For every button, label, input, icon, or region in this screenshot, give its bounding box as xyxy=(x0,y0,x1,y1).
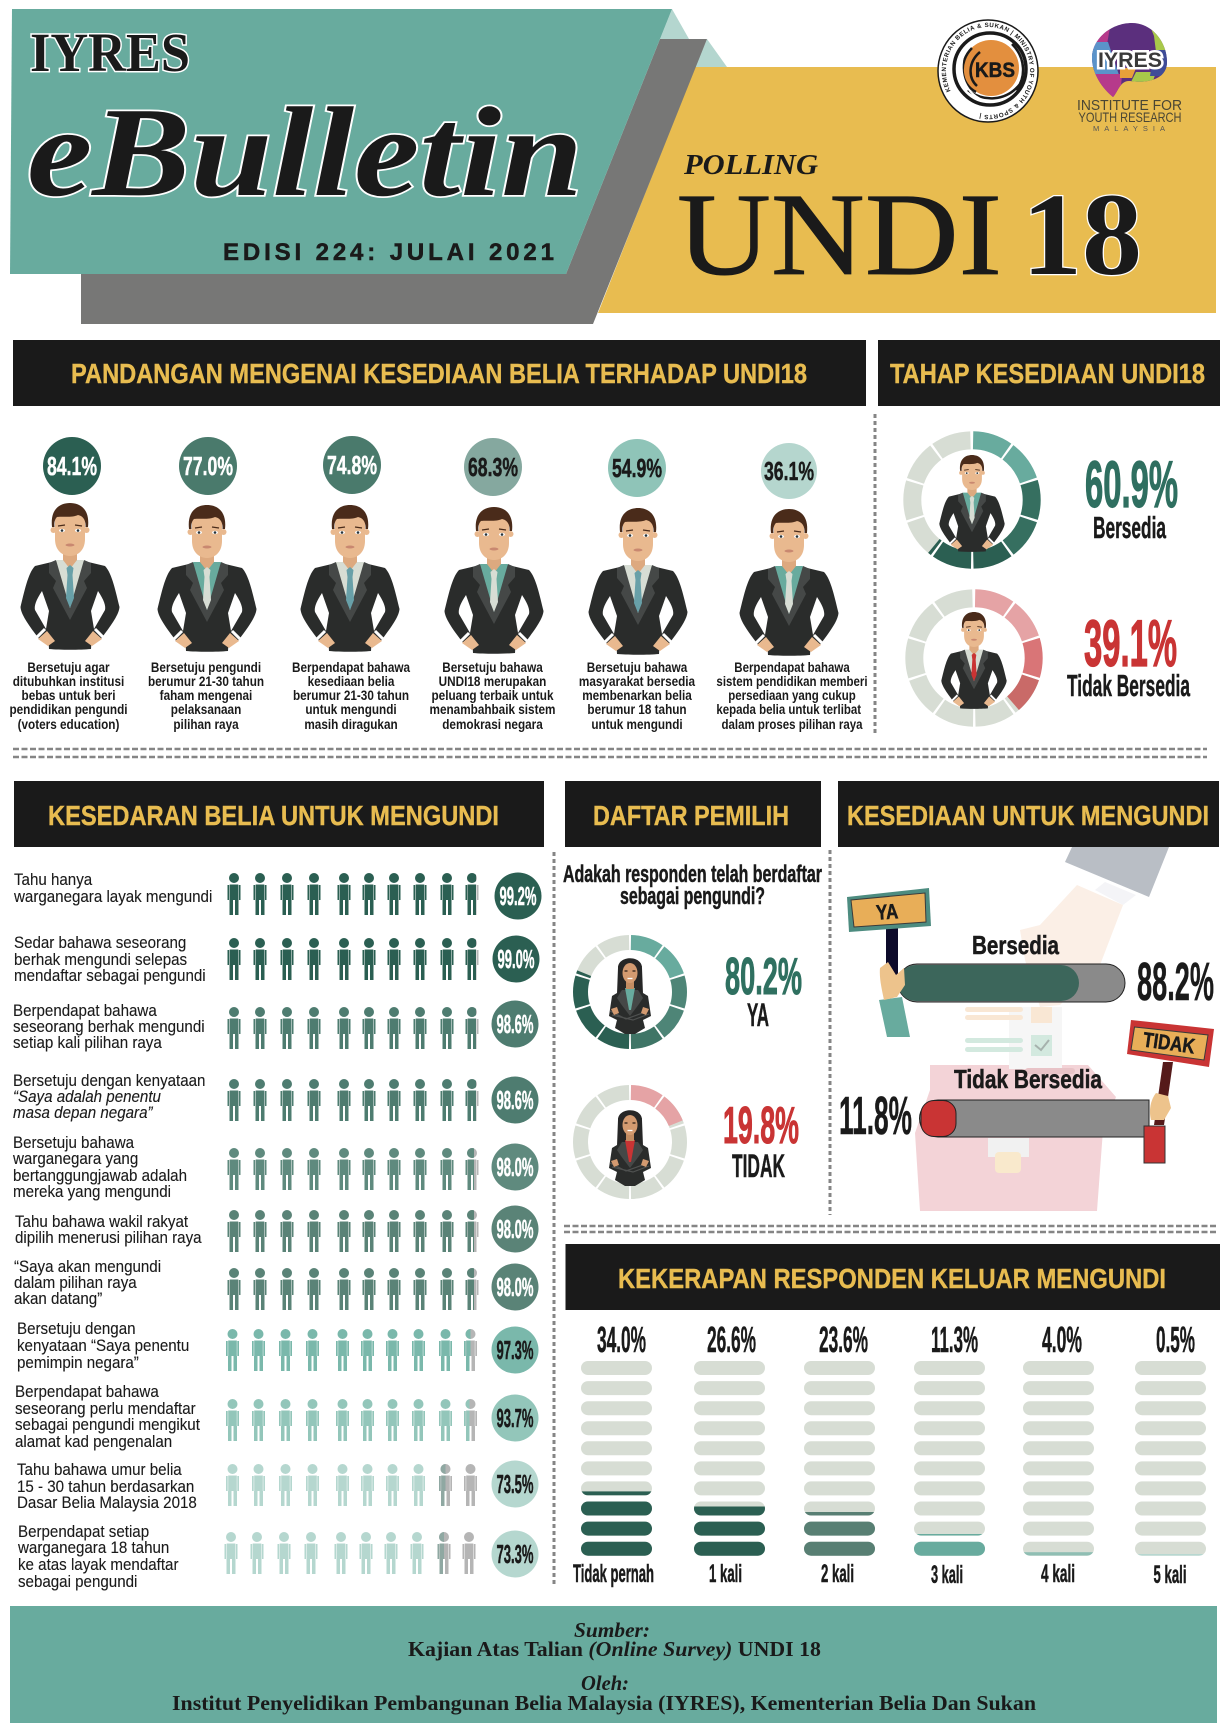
item: 84.1% xyxy=(9,437,128,732)
row 11: 73.3%: ke atas layak mendaftar xyxy=(18,1555,179,1574)
panel: kesedaran xyxy=(12,781,544,1591)
item: 77.0%: Bersetuju pengundi xyxy=(151,659,261,675)
light teal fold triangles xyxy=(660,9,727,67)
column: 4 kali 4.0%: 4.0% xyxy=(1042,1319,1082,1360)
column: 2 kali 23.6%: 2 kali xyxy=(821,1560,854,1588)
row 4: 98.6%: 98.6% xyxy=(496,1085,534,1115)
donut: tidak bersedia xyxy=(914,598,1034,718)
row 11: 73.3%: 73.3% xyxy=(496,1539,534,1569)
item: 68.3%: UNDI18 merupakan xyxy=(439,673,546,689)
panel: kekerapan xyxy=(566,1244,1220,1589)
heading: kekerapan xyxy=(566,1244,1220,1310)
icon: YA sign with hand xyxy=(847,888,931,1037)
item: 77.0%: berumur 21-30 tahun xyxy=(148,673,264,689)
item: 54.9%: 54.9% xyxy=(612,453,662,483)
footer: sources xyxy=(10,1606,1217,1723)
item: 77.0% xyxy=(148,437,264,732)
row 9: 93.7%: alamat kad pengenalan xyxy=(15,1432,172,1451)
publisher text: Institut Penyelidikan Pembangunan Belia Malaysia (IYRES), Kementerian Belia Dan Sukan xyxy=(172,1691,1036,1715)
row 2: 99.0%: Sedar bahawa seseorang xyxy=(14,933,186,952)
teal title panel xyxy=(10,9,672,274)
heading: pandangan: PANDANGAN MENGENAI KESEDIAAN BELIA TERHADAP UNDI18 xyxy=(71,358,807,389)
item: 74.8%: kesediaan belia xyxy=(308,673,395,689)
item: 36.1% xyxy=(716,443,868,732)
IYRES logo xyxy=(1077,16,1182,133)
column: 3 kali 11.3% xyxy=(914,1319,985,1589)
KBS logo: KEMENTERIAN BELIA & SUKAN | MINISTRY OF YOUTH & SPORTS | xyxy=(942,22,1034,120)
heading: daftar pemilih: DAFTAR PEMILIH xyxy=(593,800,789,831)
donut: tidak xyxy=(580,1092,680,1192)
UNDI wording: UNDI xyxy=(677,169,1002,300)
row 8: 97.3% xyxy=(17,1319,538,1374)
row 3: 98.6%: 98.6% xyxy=(496,1009,534,1039)
row 5: 98.0%: warganegara yang xyxy=(12,1149,138,1168)
row 2: 99.0%: 99.0% xyxy=(498,944,534,974)
row 7: 98.0%: 98.0% xyxy=(496,1272,534,1302)
item: 68.3%: peluang terbaik untuk xyxy=(432,687,554,703)
label: ya: YA xyxy=(747,997,769,1033)
row 9: 93.7%: seseorang perlu mendaftar xyxy=(15,1399,196,1418)
item: 68.3%: menambahbaik sistem xyxy=(430,701,555,717)
item: 84.1%: bebas untuk beri xyxy=(22,687,115,703)
18 wording: 18 xyxy=(1022,169,1142,300)
IYRES logo: MALAYSIA xyxy=(1093,124,1165,133)
row 1: 99.2%: warganegara layak mengundi xyxy=(13,887,212,906)
heading: daftar pemilih xyxy=(565,781,821,847)
row 5: 98.0%: mereka yang mengundi xyxy=(13,1182,171,1201)
row 11: 73.3%: Berpendapat setiap xyxy=(18,1522,149,1541)
item: 84.1%: ditubuhkan institusi xyxy=(13,673,124,689)
IYRES logo: IYRES xyxy=(1098,49,1162,72)
item: 54.9%: masyarakat bersedia xyxy=(579,673,696,689)
item: 36.1%: kepada belia untuk terlibat xyxy=(716,701,862,717)
row 9: 93.7% xyxy=(15,1382,538,1451)
row 11: 73.3%: sebagai pengundi xyxy=(18,1572,137,1591)
row 8: 97.3%: pemimpin negara” xyxy=(17,1353,139,1372)
row 6: 98.0%: 98.0% xyxy=(496,1214,534,1244)
row 3: 98.6%: Berpendapat bahawa xyxy=(13,1001,157,1020)
item: 74.8%: untuk mengundi xyxy=(305,701,397,717)
column: 2 kali 23.6%: 23.6% xyxy=(819,1319,868,1360)
heading: kesediaan untuk mengundi xyxy=(838,781,1219,847)
row 7: 98.0% xyxy=(14,1257,538,1310)
item: 54.9%: berumur 18 tahun xyxy=(587,701,687,717)
label: bersedia: Bersedia xyxy=(1093,510,1166,545)
panel: tahap kesediaan xyxy=(878,340,1220,718)
column: tidak pernah 34.0%: 34.0% xyxy=(597,1319,646,1360)
item: 54.9%: membenarkan belia xyxy=(582,687,693,703)
item: 77.0%: pilihan raya xyxy=(173,716,239,732)
column: 2 kali 23.6% xyxy=(804,1319,875,1588)
row 4: 98.6%: “Saya adalah penentu xyxy=(13,1087,161,1106)
row 11: 73.3% xyxy=(17,1522,538,1591)
row 7: 98.0%: dalam pilihan raya xyxy=(14,1273,137,1292)
row 3: 98.6%: setiap kali pilihan raya xyxy=(13,1033,162,1052)
row 5: 98.0% xyxy=(12,1133,538,1201)
IYRES logo: INSTITUTE FOR xyxy=(1077,98,1182,114)
column: 4 kali 4.0% xyxy=(1023,1319,1094,1588)
row 9: 93.7%: 93.7% xyxy=(496,1403,534,1433)
row 7: 98.0%: akan datang” xyxy=(14,1289,102,1308)
item: 54.9%: untuk mengundi xyxy=(591,716,683,732)
item: 68.3%: Bersetuju bahawa xyxy=(442,659,543,675)
item: 74.8% xyxy=(292,436,411,732)
bar: tidak bersedia: 11.8% xyxy=(839,1086,912,1146)
row 6: 98.0%: dipilih menerusi pilihan raya xyxy=(15,1228,202,1247)
figure: man bersedia xyxy=(939,455,1005,552)
item: 36.1%: 36.1% xyxy=(764,456,814,486)
item: 36.1%: dalam proses pilihan raya xyxy=(722,716,863,732)
item: 36.1%: Berpendapat bahawa xyxy=(734,659,850,675)
column: 1 kali 26.6%: 26.6% xyxy=(707,1319,756,1360)
source label: Sumber: xyxy=(574,1618,650,1642)
row 2: 99.0% xyxy=(14,933,540,985)
row 4: 98.6%: masa depan negara” xyxy=(13,1103,153,1122)
column: 5 kali 0.5%: 5 kali xyxy=(1154,1561,1186,1589)
panel: kesediaan untuk mengundi xyxy=(838,781,1219,1211)
row 8: 97.3%: kenyataan “Saya penentu xyxy=(17,1336,189,1355)
eBulletin title: eBulletin xyxy=(27,81,583,223)
icon: TIDAK sign with hand xyxy=(1127,1020,1214,1163)
item: 36.1%: sistem pendidikan memberi xyxy=(716,673,868,689)
panel: daftar pemilih xyxy=(563,781,822,1192)
item: 77.0%: faham mengenai xyxy=(160,687,252,703)
grey shadow panel xyxy=(81,39,707,324)
row 7: 98.0%: “Saya akan mengundi xyxy=(14,1257,161,1276)
heading: tahap xyxy=(878,340,1220,406)
item: 74.8%: masih diragukan xyxy=(304,716,398,732)
question text: Adakah responden telah berdaftar xyxy=(563,861,822,888)
row 10: 73.5% xyxy=(17,1460,538,1512)
row 5: 98.0%: bertanggungjawab adalah xyxy=(13,1166,187,1185)
row 5: 98.0%: 98.0% xyxy=(496,1152,534,1182)
item: 84.1%: 84.1% xyxy=(47,451,97,481)
question text: sebagai pengundi? xyxy=(620,883,765,910)
item: 84.1%: (voters education) xyxy=(18,716,119,732)
panel: pandangan xyxy=(9,340,868,732)
illustration: ballot box background xyxy=(915,847,1169,1211)
row 8: 97.3%: 97.3% xyxy=(496,1335,534,1365)
column: 3 kali 11.3%: 11.3% xyxy=(931,1319,978,1360)
bar: tidak bersedia: Tidak Bersedia xyxy=(954,1064,1102,1094)
heading: kesedaran: KESEDARAN BELIA UNTUK MENGUNDI xyxy=(48,800,499,831)
column: 5 kali 0.5% xyxy=(1135,1319,1206,1589)
bar: bersedia: Bersedia xyxy=(972,930,1059,960)
IYRES wordmark: IYRES xyxy=(30,22,190,83)
heading: kesedaran xyxy=(14,781,544,847)
item: 36.1%: persediaan yang cukup xyxy=(728,687,856,703)
publisher label: Oleh: xyxy=(581,1671,629,1695)
row 9: 93.7%: sebagai pengundi mengikut xyxy=(15,1415,200,1434)
column: tidak pernah 34.0%: Tidak pernah xyxy=(573,1560,654,1588)
row 10: 73.5%: Dasar Belia Malaysia 2018 xyxy=(17,1493,197,1512)
row 8: 97.3%: Bersetuju dengan xyxy=(17,1319,136,1338)
stat: 80.2%: 80.2% xyxy=(725,948,802,1006)
bar: bersedia xyxy=(898,930,1214,1012)
column: 3 kali 11.3%: 3 kali xyxy=(931,1561,963,1589)
item: 54.9%: Bersetuju bahawa xyxy=(587,659,688,675)
row 3: 98.6% xyxy=(13,1000,538,1052)
stat: 19.8%: 19.8% xyxy=(723,1097,799,1155)
item: 74.8%: 74.8% xyxy=(327,450,377,480)
item: 68.3%: demokrasi negara xyxy=(442,716,543,732)
yellow title panel xyxy=(598,67,1216,313)
row 1: 99.2%: Tahu hanya xyxy=(14,870,92,889)
row 4: 98.6%: Bersetuju dengan kenyataan xyxy=(13,1071,205,1090)
item: 54.9% xyxy=(579,439,696,732)
figure: man tidak bersedia xyxy=(941,612,1007,709)
row 10: 73.5%: 15 - 30 tahun berdasarkan xyxy=(17,1477,194,1496)
icon: TIDAK sign with hand: TIDAK xyxy=(1142,1028,1196,1059)
heading: pandangan xyxy=(13,340,866,406)
column: tidak pernah 34.0% xyxy=(573,1319,654,1588)
icon: YA sign with hand: YA xyxy=(875,900,899,925)
row 10: 73.5%: Tahu bahawa umur belia xyxy=(17,1460,182,1479)
row 1: 99.2% xyxy=(13,870,541,920)
row 4: 98.6% xyxy=(13,1071,538,1124)
figure: woman ya xyxy=(609,958,651,1034)
header banner xyxy=(10,9,1216,324)
row 5: 98.0%: Bersetuju bahawa xyxy=(13,1133,134,1152)
row 1: 99.2%: 99.2% xyxy=(500,881,536,911)
IYRES logo: YOUTH RESEARCH xyxy=(1078,109,1182,125)
item: 68.3%: 68.3% xyxy=(468,452,518,482)
polling label: POLLING xyxy=(683,149,818,181)
donut: ya xyxy=(580,942,680,1042)
item: 84.1%: pendidikan pengundi xyxy=(9,701,128,717)
edition line: EDISI 224: JULAI 2021 xyxy=(223,239,554,266)
item: 84.1%: Bersetuju agar xyxy=(27,659,110,675)
figure: woman tidak xyxy=(609,1110,651,1186)
label: tidak: TIDAK xyxy=(732,1148,785,1184)
item: 68.3% xyxy=(430,438,555,732)
item: 74.8%: Berpendapat bahawa xyxy=(292,659,411,675)
row 6: 98.0% xyxy=(15,1206,538,1252)
KBS logo: KBS xyxy=(975,59,1015,82)
item: 77.0%: pelaksanaan xyxy=(171,701,241,717)
column: 1 kali 26.6%: 1 kali xyxy=(709,1560,742,1588)
row 3: 98.6%: seseorang berhak mengundi xyxy=(13,1017,205,1036)
item: 77.0%: 77.0% xyxy=(183,451,233,481)
column: 4 kali 4.0%: 4 kali xyxy=(1041,1560,1075,1588)
column: 1 kali 26.6% xyxy=(694,1319,765,1588)
row 10: 73.5%: 73.5% xyxy=(496,1469,534,1499)
row 9: 93.7%: Berpendapat bahawa xyxy=(15,1382,159,1401)
source text: Kajian Atas Talian (Online Survey) UNDI 18 xyxy=(408,1637,821,1661)
row 6: 98.0%: Tahu bahawa wakil rakyat xyxy=(15,1212,189,1231)
item: 74.8%: berumur 21-30 tahun xyxy=(293,687,409,703)
question text xyxy=(563,861,822,910)
donut: bersedia xyxy=(912,440,1032,560)
bar: tidak bersedia xyxy=(839,1064,1149,1146)
row 2: 99.0%: mendaftar sebagai pengundi xyxy=(14,966,206,985)
row 11: 73.3%: warganegara 18 tahun xyxy=(17,1538,169,1557)
row 2: 99.0%: berhak mengundi selepas xyxy=(14,950,187,969)
